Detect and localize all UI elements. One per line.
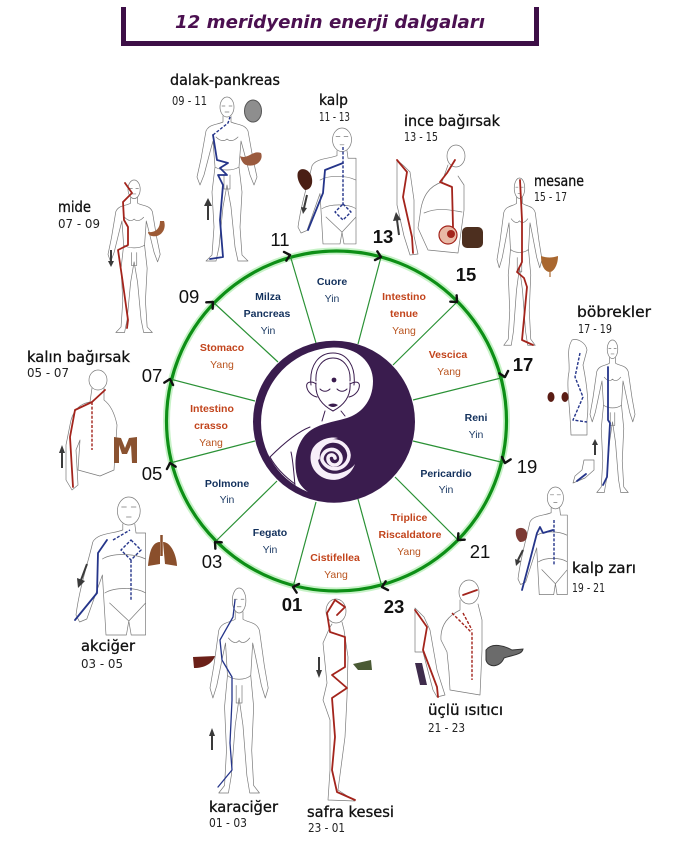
hour numbers: 13 xyxy=(373,226,393,247)
segment: Polmone: Polmone xyxy=(205,478,249,490)
meridian: böbrekler: böbrekler xyxy=(577,303,652,321)
hour numbers: 11 xyxy=(270,229,290,250)
meridian: kalp zarı xyxy=(515,487,636,595)
segment: Intestino tenue: tenue xyxy=(390,308,418,320)
meridian: mesane: 15 - 17 xyxy=(534,189,567,204)
yin-yang meditating figure xyxy=(253,341,415,503)
meridian: mide: 07 - 09 xyxy=(58,216,100,231)
meridian: dalak-pankreas: dalak-pankreas xyxy=(170,71,280,89)
segment: Triplice Riscaldatore: Yang xyxy=(397,546,421,558)
segment: Reni xyxy=(465,412,487,441)
segment: Triplice Riscaldatore: Riscaldatore xyxy=(378,529,442,541)
title: 12 meridyenin enerji dalgaları xyxy=(175,13,485,33)
meridian: böbrekler xyxy=(548,303,652,493)
hour numbers: 07 xyxy=(142,365,162,386)
spokes xyxy=(170,255,505,587)
segment: Cistifellea: Cistifellea xyxy=(310,552,360,564)
segment: Intestino crasso: Yang xyxy=(199,437,223,449)
segment: Pericardio: Yin xyxy=(439,484,454,496)
meridian: üçlü ısıtıcı: üçlü ısıtıcı xyxy=(428,701,503,719)
meridian: mide: mide xyxy=(58,198,91,216)
hour numbers: 01 xyxy=(282,594,302,615)
segment: Triplice Riscaldatore xyxy=(378,512,442,558)
meridian: kalın bağırsak: kalın bağırsak xyxy=(27,348,130,366)
segment: Vescica xyxy=(429,349,467,378)
meridian: kalın bağırsak: 05 - 07 xyxy=(27,365,69,380)
segment: Intestino crasso: crasso xyxy=(194,420,228,432)
hour numbers: 03 xyxy=(202,551,222,572)
hour numbers xyxy=(142,226,537,617)
segment: Milza Pancreas: Pancreas xyxy=(244,308,291,320)
segment: Pericardio: Pericardio xyxy=(420,468,472,480)
hour numbers: 17 xyxy=(513,354,533,375)
segment: Cuore: Yin xyxy=(325,293,340,305)
meridian: kalp xyxy=(297,91,356,244)
clockwise arrowheads xyxy=(164,251,511,593)
meridian: karaciğer: karaciğer xyxy=(209,798,279,816)
meridian: ince bağırsak: ince bağırsak xyxy=(404,112,500,130)
meridian: safra kesesi: safra kesesi xyxy=(307,803,394,821)
segment: Cuore xyxy=(317,276,347,305)
meridian: safra kesesi xyxy=(307,599,394,835)
segment: Reni: Reni xyxy=(465,412,487,424)
meridian: kalp: kalp xyxy=(319,91,348,109)
meridian: akciğer: 03 - 05 xyxy=(81,656,123,671)
segment: Milza Pancreas: Milza xyxy=(255,291,281,303)
meridian: dalak-pankreas: 09 - 11 xyxy=(172,93,207,108)
meridian: dalak-pankreas xyxy=(170,71,280,261)
meridian: böbrekler: 17 - 19 xyxy=(578,321,612,336)
meridian: karaciğer xyxy=(193,588,279,830)
hour numbers: 05 xyxy=(142,463,162,484)
segment: Fegato: Fegato xyxy=(253,527,287,539)
hour numbers: 19 xyxy=(517,456,537,477)
meridian: kalp zarı: kalp zarı xyxy=(572,559,636,577)
meridian: akciğer xyxy=(75,497,177,671)
segment: Fegato xyxy=(253,527,287,556)
segment: Cuore: Cuore xyxy=(317,276,347,288)
hour numbers: 09 xyxy=(179,286,199,307)
segment: Intestino tenue: Intestino xyxy=(382,291,426,303)
segment: Intestino crasso xyxy=(190,403,234,449)
segment: Reni: Yin xyxy=(469,429,484,441)
segment: Polmone: Yin xyxy=(220,494,235,506)
meridian: kalp zarı: 19 - 21 xyxy=(572,580,605,595)
segment: Pericardio xyxy=(420,468,472,496)
meridian: kalın bağırsak xyxy=(27,348,137,490)
hour numbers: 15 xyxy=(456,264,476,285)
title banner xyxy=(124,7,536,44)
segment: Intestino crasso: Intestino xyxy=(190,403,234,415)
segment: Fegato: Yin xyxy=(263,544,278,556)
segment: Intestino tenue xyxy=(382,291,426,337)
segment: Vescica: Vescica xyxy=(429,349,467,361)
meridian: ince bağırsak: 13 - 15 xyxy=(404,129,438,144)
meridian wheel xyxy=(142,226,537,617)
meridian: mesane xyxy=(497,172,584,345)
segment: Triplice Riscaldatore: Triplice xyxy=(391,512,428,524)
meridian: karaciğer: 01 - 03 xyxy=(209,815,247,830)
meridian: akciğer: akciğer xyxy=(81,637,136,655)
segment: Intestino tenue: Yang xyxy=(392,325,416,337)
green ring xyxy=(166,251,506,591)
segment: Stomaco: Yang xyxy=(210,359,234,371)
meridian: üçlü ısıtıcı: 21 - 23 xyxy=(428,720,465,735)
meridian: safra kesesi: 23 - 01 xyxy=(308,820,345,835)
segment: Polmone xyxy=(205,478,249,506)
meridian: ince bağırsak xyxy=(393,112,500,255)
segment: Cistifellea xyxy=(310,552,360,581)
hour numbers: 21 xyxy=(470,541,490,562)
segment: Milza Pancreas xyxy=(244,291,291,337)
hour numbers: 23 xyxy=(384,596,404,617)
segment: Milza Pancreas: Yin xyxy=(261,325,276,337)
meridian: üçlü ısıtıcı xyxy=(415,580,523,735)
segment: Vescica: Yang xyxy=(437,366,461,378)
meridian: mesane: mesane xyxy=(534,172,584,190)
meridian: mide xyxy=(58,180,165,333)
meridian: kalp: 11 - 13 xyxy=(319,109,350,124)
segment: Cistifellea: Yang xyxy=(324,569,348,581)
segment: Stomaco xyxy=(200,342,244,371)
segment: Stomaco: Stomaco xyxy=(200,342,244,354)
